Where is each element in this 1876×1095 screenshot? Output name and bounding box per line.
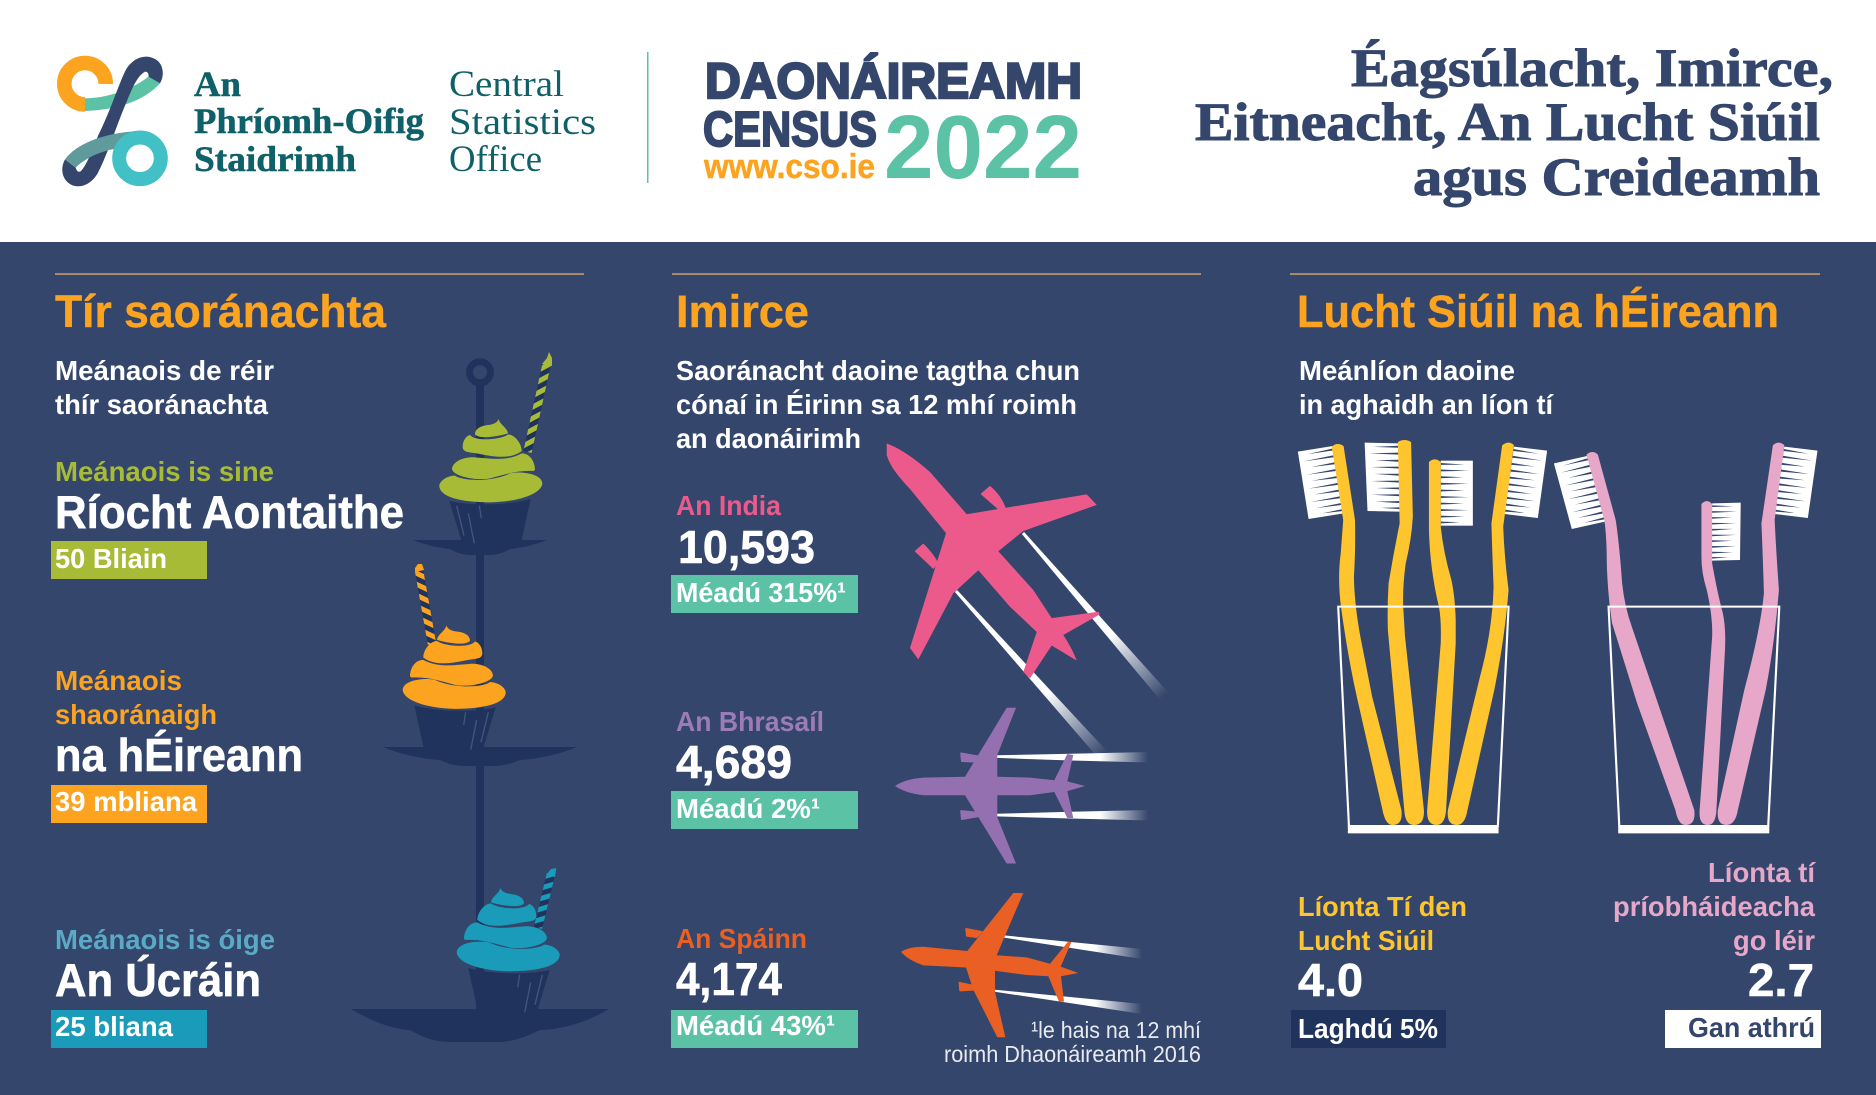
stat: Spain: 4,174 [676, 953, 782, 1005]
logo text: Irish name: Staidrimh [194, 139, 356, 179]
stat: Irish citizens [51, 665, 303, 823]
stat: oldest citizenship [51, 456, 404, 579]
stat: Brazil: An Bhrasaíl [676, 706, 824, 737]
stat: Irish citizens: na hÉireann [55, 729, 303, 781]
icon: orange plane with trails [901, 893, 1142, 1037]
stat: Traveller households: 4.0 [1298, 954, 1363, 1006]
census 2022 logo: CENSUS [703, 103, 877, 157]
stat: India [671, 490, 858, 613]
logo text: English name: Office [449, 139, 542, 180]
stat: Irish citizens: Meánaois [55, 665, 182, 696]
stat: India: An India [676, 490, 781, 521]
stat: India: Méadú 315%¹ [676, 577, 846, 608]
text block: household size intro: in aghaidh an líon tí [1299, 389, 1554, 420]
title: agus Creideamh [1413, 147, 1820, 207]
logo text: Irish name: Phríomh-Oifig [194, 101, 424, 141]
stat: oldest citizenship: 50 Bliain [55, 543, 167, 574]
stat: all private households: Gan athrú [1688, 1012, 1815, 1043]
title: Éagsúlacht, Imirce, [1351, 38, 1833, 98]
logo icon: Central Statistics Office [62, 57, 163, 186]
logo text: English name [449, 64, 596, 180]
stat: Spain: An Spáinn [676, 923, 807, 954]
icon: four yellow toothbrushes in a glass [1298, 440, 1547, 833]
text block: household size intro [1299, 355, 1554, 420]
stat: Brazil [671, 706, 858, 829]
stat: all private households: Líonta tí [1708, 857, 1816, 888]
stat: Spain: Méadú 43%¹ [676, 1010, 835, 1041]
stat: Irish citizens: shaoránaigh [55, 699, 217, 730]
stat: youngest citizenship: Meánaois is óige [55, 924, 275, 955]
stat: Traveller households: Laghdú 5% [1298, 1013, 1438, 1044]
text block: migration intro [676, 355, 1080, 454]
logo text: English name: Central [449, 64, 564, 105]
stat: India: 10,593 [678, 521, 815, 573]
census 2022 logo: www.cso.ie [703, 148, 875, 186]
logo text: Irish name: An [194, 64, 241, 104]
stat: all private households [1613, 857, 1821, 1048]
icon: orange cupcake [403, 564, 506, 750]
stat: all private households: go léir [1733, 925, 1815, 956]
stat: youngest citizenship: 25 bliana [55, 1011, 173, 1042]
stat: all private households: 2.7 [1748, 954, 1814, 1006]
stat: Irish citizens: 39 mbliana [55, 786, 197, 817]
text block: household size intro: Meánlíon daoine [1299, 355, 1515, 386]
stat: Brazil: Méadú 2%¹ [676, 793, 820, 824]
panel rules [55, 273, 1820, 275]
text block: migration intro: Saoránacht daoine tagtha chun [676, 355, 1080, 386]
icon: green cupcake [439, 352, 552, 544]
heading: citizenship: Tír saoránachta [55, 286, 387, 337]
text block: citizenship intro: Meánaois de réir [55, 355, 274, 386]
text block: citizenship intro: thír saoránachta [55, 389, 268, 420]
icon: purple plane with trails [895, 708, 1148, 864]
logo text: Irish name [194, 64, 424, 179]
footnote: roimh Dhaonáireamh 2016 [944, 1041, 1201, 1067]
header divider [647, 52, 648, 183]
title: Eitneacht, An Lucht Siúil [1195, 92, 1820, 152]
stat: youngest citizenship: An Úcráin [55, 954, 261, 1006]
icon: three pink toothbrushes in a glass [1554, 443, 1817, 833]
header band [0, 0, 1876, 242]
heading: migration: Imirce [676, 286, 809, 337]
stat: Brazil: 4,689 [676, 736, 792, 788]
stat: Spain [671, 923, 858, 1048]
stat: youngest citizenship [51, 924, 275, 1048]
heading: Irish Travellers: Lucht Siúil na hÉireann [1297, 286, 1779, 337]
census 2022 logo: 2022 [884, 98, 1082, 198]
icon: cake stand [351, 362, 609, 1042]
text block: migration intro: an daonáirimh [676, 423, 861, 454]
text block: migration intro: cónaí in Éirinn sa 12 mhí roimh [676, 389, 1077, 420]
panel: migration [671, 286, 1202, 1067]
stat: oldest citizenship: Meánaois is sine [55, 456, 274, 487]
stat: all private households: príobháideacha [1613, 891, 1815, 922]
stat: Traveller households: Lucht Siúil [1298, 925, 1434, 956]
logo text: English name: Statistics [449, 102, 596, 143]
stat: Traveller households [1291, 891, 1467, 1048]
panel: citizenship [51, 286, 609, 1048]
icon: pink plane with trails [887, 444, 1168, 759]
footnote [944, 1017, 1202, 1067]
stat: Traveller households: Líonta Tí den [1298, 891, 1467, 922]
title [1195, 38, 1833, 207]
footnote: ¹le hais na 12 mhí [1031, 1017, 1202, 1043]
panel: Irish Travellers [1291, 286, 1821, 1048]
census 2022 logo: DAONÁIREAMH [705, 53, 1082, 109]
stat: oldest citizenship: Ríocht Aontaithe [55, 486, 404, 538]
text block: citizenship intro [55, 355, 274, 420]
icon: blue cupcake [457, 868, 560, 1013]
census 2022 logo [703, 53, 1082, 198]
